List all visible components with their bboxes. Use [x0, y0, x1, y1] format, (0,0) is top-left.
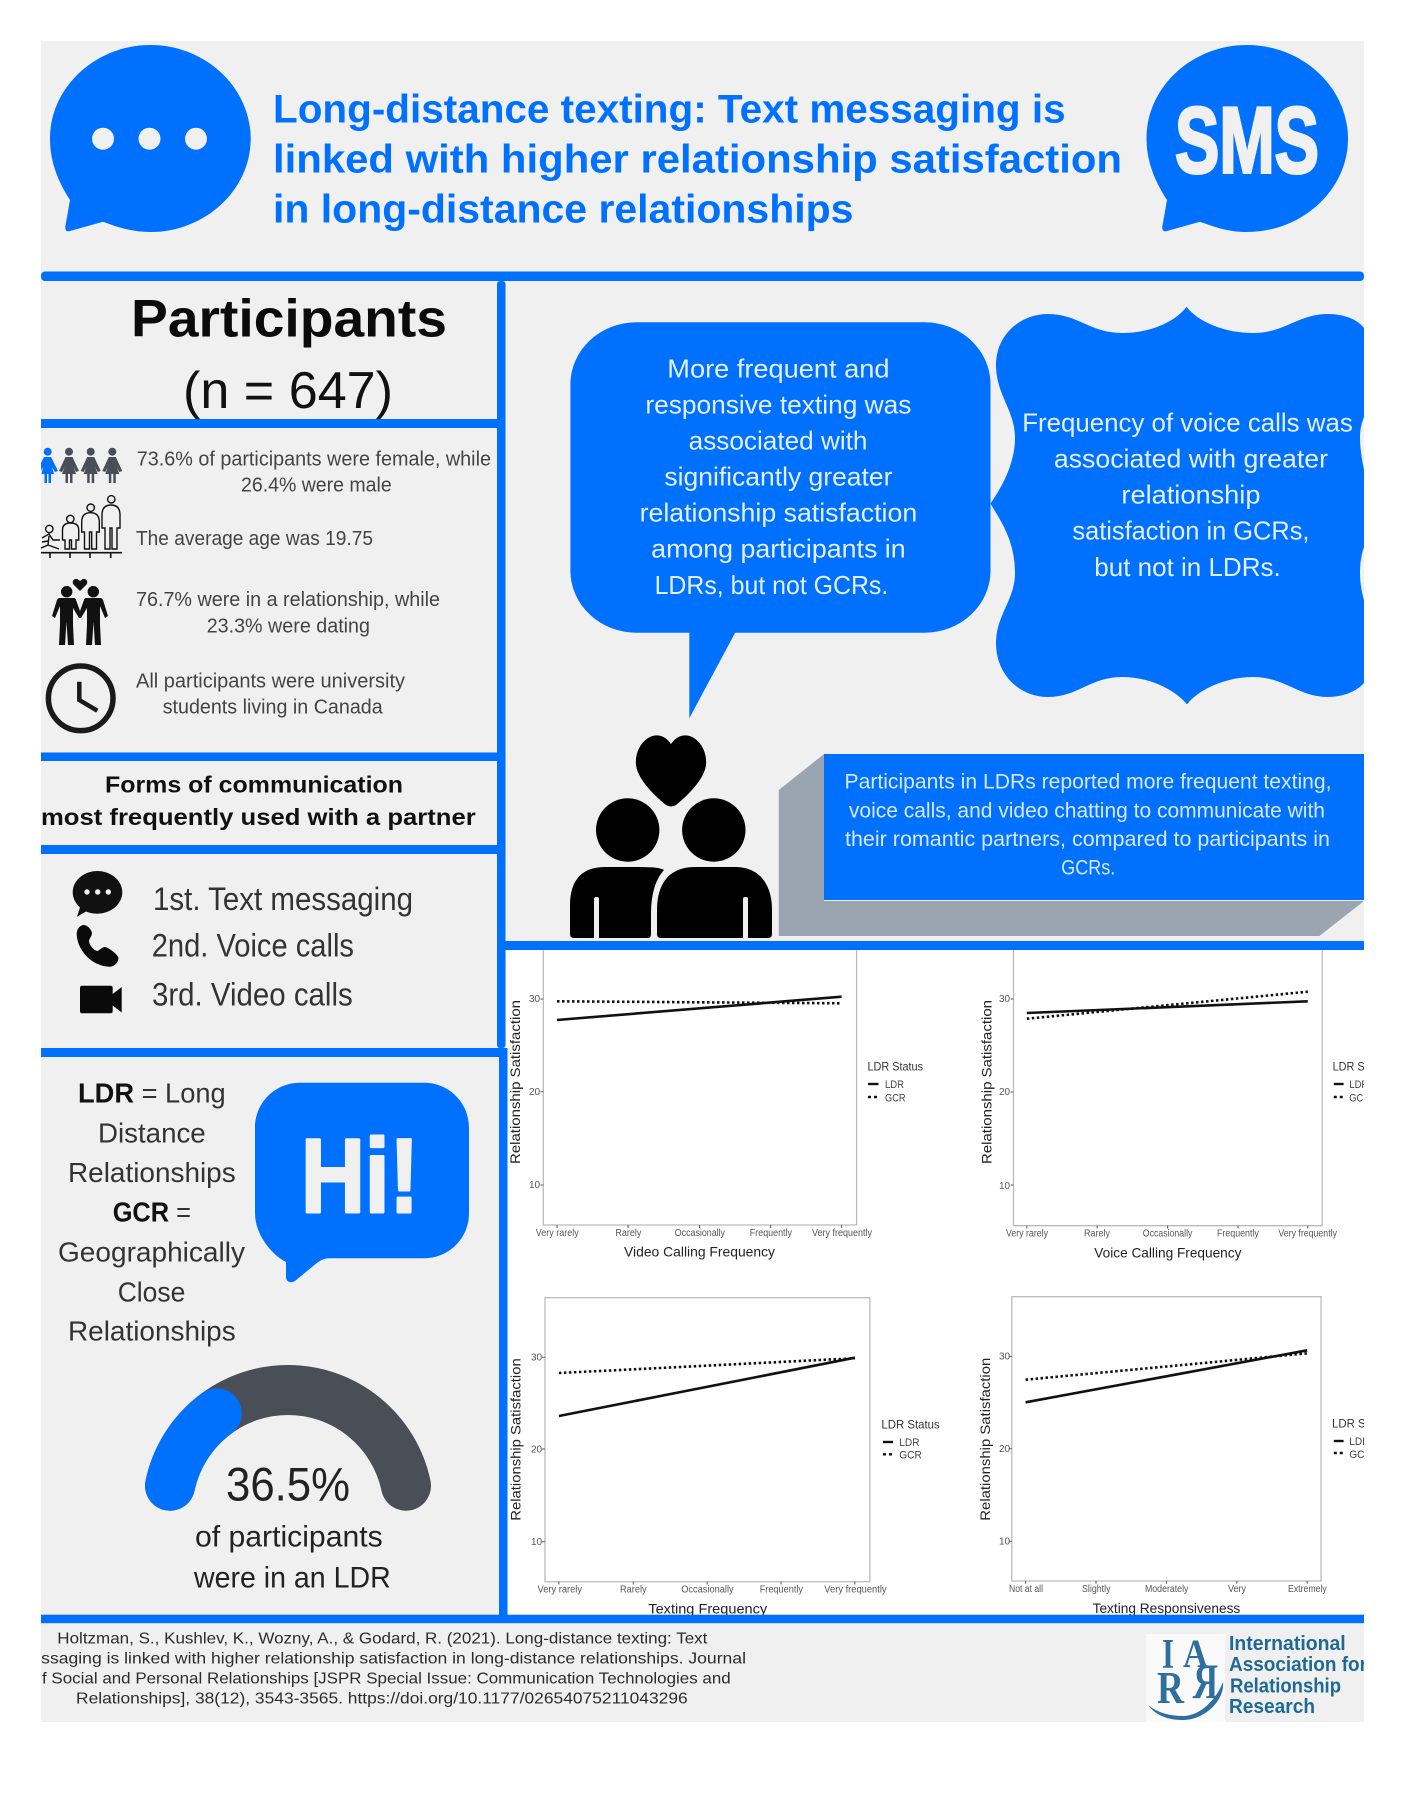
chart: voice calling frequency: Very frequently [1278, 1228, 1337, 1240]
text: citation: Relationships], 38(12), 3543-3565. https://doi.org/10.1177/02654075211043296 [76, 1690, 688, 1707]
chart: voice calling frequency: Rarely [1084, 1228, 1110, 1240]
heading: participants: Participants [131, 290, 447, 349]
chart: texting frequency: Very frequently [824, 1585, 887, 1596]
icon: Hi bubble [255, 1083, 469, 1282]
text: IARR name: International [1229, 1633, 1346, 1655]
icon: SMS bubble [1146, 45, 1348, 232]
chart: 36.5% gauge [170, 1390, 406, 1486]
heading: forms of communication: Forms of communication [105, 771, 403, 797]
chart: texting responsiveness: LDR Status [1332, 1417, 1390, 1431]
title: linked with higher relationship satisfaction [273, 138, 1122, 182]
icon: IARR logo: A [1183, 1631, 1208, 1676]
chart: video calling frequency [507, 945, 923, 1260]
icon: IARR logo: I [1162, 1632, 1174, 1678]
chart: texting frequency: LDR Status [881, 1418, 940, 1432]
chart: voice calling frequency: Frequently [1217, 1228, 1259, 1240]
callout: texting result speech bubble: among participants in [651, 534, 906, 564]
chart: video calling frequency: 10 [529, 1180, 541, 1191]
text: IARR name: Research [1229, 1696, 1315, 1718]
chart: video calling frequency: GCR [885, 1092, 906, 1104]
icon: couple with heart [570, 735, 772, 939]
title [273, 88, 1122, 232]
chart: texting responsiveness: Not at all [1009, 1584, 1043, 1595]
text: IARR name [1230, 1635, 1364, 1713]
text: LDR and GCR definitions: GCR = [113, 1196, 191, 1227]
chart: video calling frequency: 30 [529, 994, 541, 1005]
chart: texting frequency: Occasionally [681, 1585, 734, 1596]
divider bars [41, 272, 1364, 1623]
icon: couple holding hands [52, 579, 108, 645]
icon: clock [48, 666, 113, 731]
text: gauge caption: 36.5% [226, 1458, 350, 1511]
callout: texting result speech bubble: LDRs, but not GCRs. [655, 570, 888, 600]
chart: texting responsiveness: Slightly [1082, 1584, 1110, 1595]
chart: texting frequency: 30 [531, 1352, 543, 1364]
text: citation: f Social and Personal Relationships [JSPR Special Issue: Communication Technologies and [42, 1670, 731, 1687]
title: Long-distance texting: Text messaging is [273, 88, 1066, 132]
callout: 3D box with LDR communication finding: voice calls, and video chatting to communicate with [849, 799, 1325, 822]
text: LDR and GCR definitions: Relationships [68, 1157, 236, 1188]
text: relationship status [136, 589, 440, 638]
icon: female figures [37, 448, 122, 483]
icon: SMS bubble: SMS [1175, 88, 1319, 192]
text: relationship status: 23.3% were dating [207, 616, 370, 638]
text: LDR and GCR definitions: Relationships [68, 1316, 236, 1347]
chart: texting frequency: Frequently [760, 1585, 803, 1596]
title: in long-distance relationships [273, 188, 853, 232]
icon: age stages [41, 496, 122, 558]
callout: 3D box with LDR communication finding: Participants in LDRs reported more frequent texting, [844, 770, 1332, 793]
chart: video calling frequency: LDR Status [868, 1060, 923, 1074]
text: gender [137, 449, 491, 497]
text: students [136, 670, 405, 718]
text: relationship status: 76.7% were in a relationship, while [136, 589, 440, 611]
chart: texting frequency: Texting Frequency [648, 1600, 767, 1616]
text: LDR and GCR definitions: LDR = Long [78, 1078, 226, 1109]
text: gauge caption: of participants [195, 1521, 383, 1554]
heading: forms of communication [41, 771, 476, 830]
chart: voice calling frequency: 30 [999, 994, 1011, 1005]
icon: IARR logo: R [1192, 1653, 1218, 1709]
text: text messaging: 1st. Text messaging [153, 881, 413, 917]
icon: video camera [80, 986, 122, 1013]
callout: 3D box with LDR communication finding [779, 754, 1364, 936]
chart: texting responsiveness [977, 1297, 1390, 1616]
chart: video calling frequency: Relationship Satisfaction [507, 1000, 523, 1164]
text: citation: Holtzman, S., Kushlev, K., Wozny, A., & Godard, R. (2021). Long-distance texting: Text [57, 1630, 708, 1647]
chart: video calling frequency: Very rarely [536, 1228, 579, 1239]
chart: voice calling frequency: LDR Status [1333, 1060, 1388, 1074]
chart: texting responsiveness: Very [1228, 1584, 1246, 1595]
chart: video calling frequency: Video Calling Frequency [624, 1244, 775, 1260]
chart: voice calling frequency: Occasionally [1143, 1228, 1192, 1240]
chart: voice calling frequency: 20 [999, 1087, 1011, 1098]
callout: voice calls result scalloped shape: Frequency of voice calls was [1022, 408, 1353, 438]
chart: texting frequency: 10 [531, 1537, 543, 1548]
icon: phone [77, 925, 118, 967]
text: gauge caption [193, 1458, 391, 1594]
icon: IARR logo: R [1157, 1662, 1185, 1713]
chart: voice calling frequency: Voice Calling Frequency [1094, 1244, 1241, 1260]
chart: texting frequency: LDR [899, 1437, 920, 1449]
heading: participants [131, 290, 447, 420]
chart: texting responsiveness: Texting Responsiveness [1093, 1600, 1240, 1616]
chart: texting responsiveness: 10 [999, 1536, 1011, 1548]
chart: video calling frequency: 20 [529, 1087, 541, 1098]
text: LDR and GCR definitions: Geographically [58, 1237, 245, 1268]
chart: texting responsiveness: 30 [999, 1352, 1011, 1362]
chart: texting frequency: Rarely [620, 1585, 647, 1596]
text: LDR and GCR definitions [58, 1078, 245, 1347]
callout: voice calls result scalloped shape: relationship [1121, 480, 1260, 510]
chart: texting responsiveness: GCR [1349, 1449, 1372, 1461]
chart: video calling frequency: Very frequently [812, 1228, 872, 1239]
text: gender: 73.6% of participants were female, while [137, 449, 491, 471]
chart: voice calling frequency: Relationship Satisfaction [978, 1000, 994, 1164]
text: video calls: 3rd. Video calls [152, 977, 353, 1013]
text: students: All participants were university [136, 670, 405, 692]
chart: texting responsiveness: 20 [999, 1444, 1011, 1455]
chart: video calling frequency: Occasionally [675, 1228, 725, 1239]
text: LDR and GCR definitions: Distance [98, 1118, 206, 1149]
callout: texting result speech bubble [570, 322, 990, 718]
chart: voice calling frequency: GCR [1349, 1092, 1370, 1104]
callout: voice calls result scalloped shape: associated with greater [1054, 444, 1328, 474]
callout: voice calls result scalloped shape: but not in LDRs. [1094, 552, 1281, 582]
heading: forms of communication: most frequently used with a partner [41, 804, 476, 830]
chart: texting frequency: 20 [531, 1444, 543, 1456]
icon: Hi bubble: Hi! [301, 1118, 419, 1235]
callout: voice calls result scalloped shape [990, 307, 1364, 704]
callout: 3D box with LDR communication finding: their romantic partners, compared to participants in [845, 828, 1330, 851]
text: gauge caption: were in an LDR [193, 1561, 391, 1594]
chart: voice calling frequency: 10 [999, 1181, 1011, 1192]
text: voice calls: 2nd. Voice calls [152, 928, 354, 964]
chart: voice calling frequency: Very rarely [1006, 1228, 1048, 1240]
text: citation: ssaging is linked with higher relationship satisfaction in long-distance relationships. Journal [41, 1650, 746, 1667]
chart: texting responsiveness: Extremely [1288, 1584, 1327, 1595]
text: citation [41, 1630, 746, 1707]
callout: texting result speech bubble: significantly greater [664, 462, 893, 492]
chart: texting responsiveness: LDR [1349, 1436, 1370, 1448]
chart: video calling frequency: Rarely [615, 1228, 641, 1239]
icon: text message [73, 871, 122, 917]
chart: texting frequency [508, 1298, 940, 1616]
icon: IARR logo [1146, 1631, 1225, 1722]
chart: video calling frequency: Frequently [750, 1228, 792, 1239]
callout: 3D box with LDR communication finding: GCRs. [1061, 856, 1115, 879]
chart: texting frequency: Relationship Satisfaction [508, 1358, 524, 1521]
callout: texting result speech bubble: relationship satisfaction [640, 498, 917, 528]
chart: voice calling frequency [978, 945, 1388, 1260]
text: IARR name: Association for [1229, 1654, 1367, 1676]
panel: charts background [506, 945, 1364, 1617]
callout: texting result speech bubble: More frequent and [667, 353, 890, 383]
chart: texting responsiveness: Relationship Satisfaction [977, 1358, 993, 1521]
chart: texting frequency: GCR [899, 1450, 922, 1462]
text: LDR and GCR definitions: Close [118, 1277, 185, 1308]
callout: voice calls result scalloped shape: satisfaction in GCRs, [1072, 516, 1310, 546]
heading: participants: (n = 647) [183, 362, 393, 420]
icon: chat bubble with dots [50, 45, 251, 232]
chart: texting frequency: Very rarely [538, 1585, 582, 1596]
chart: voice calling frequency: LDR [1349, 1079, 1368, 1091]
text: IARR name: Relationship [1230, 1676, 1341, 1698]
text: age: The average age was 19.75 [136, 528, 373, 550]
text: gender: 26.4% were male [241, 475, 392, 497]
chart: texting responsiveness: Moderately [1145, 1584, 1188, 1595]
callout: texting result speech bubble: associated with [689, 425, 868, 455]
callout: texting result speech bubble: responsive texting was [645, 389, 911, 419]
chart: video calling frequency: LDR [885, 1079, 904, 1091]
text: students: students living in Canada [163, 696, 384, 718]
